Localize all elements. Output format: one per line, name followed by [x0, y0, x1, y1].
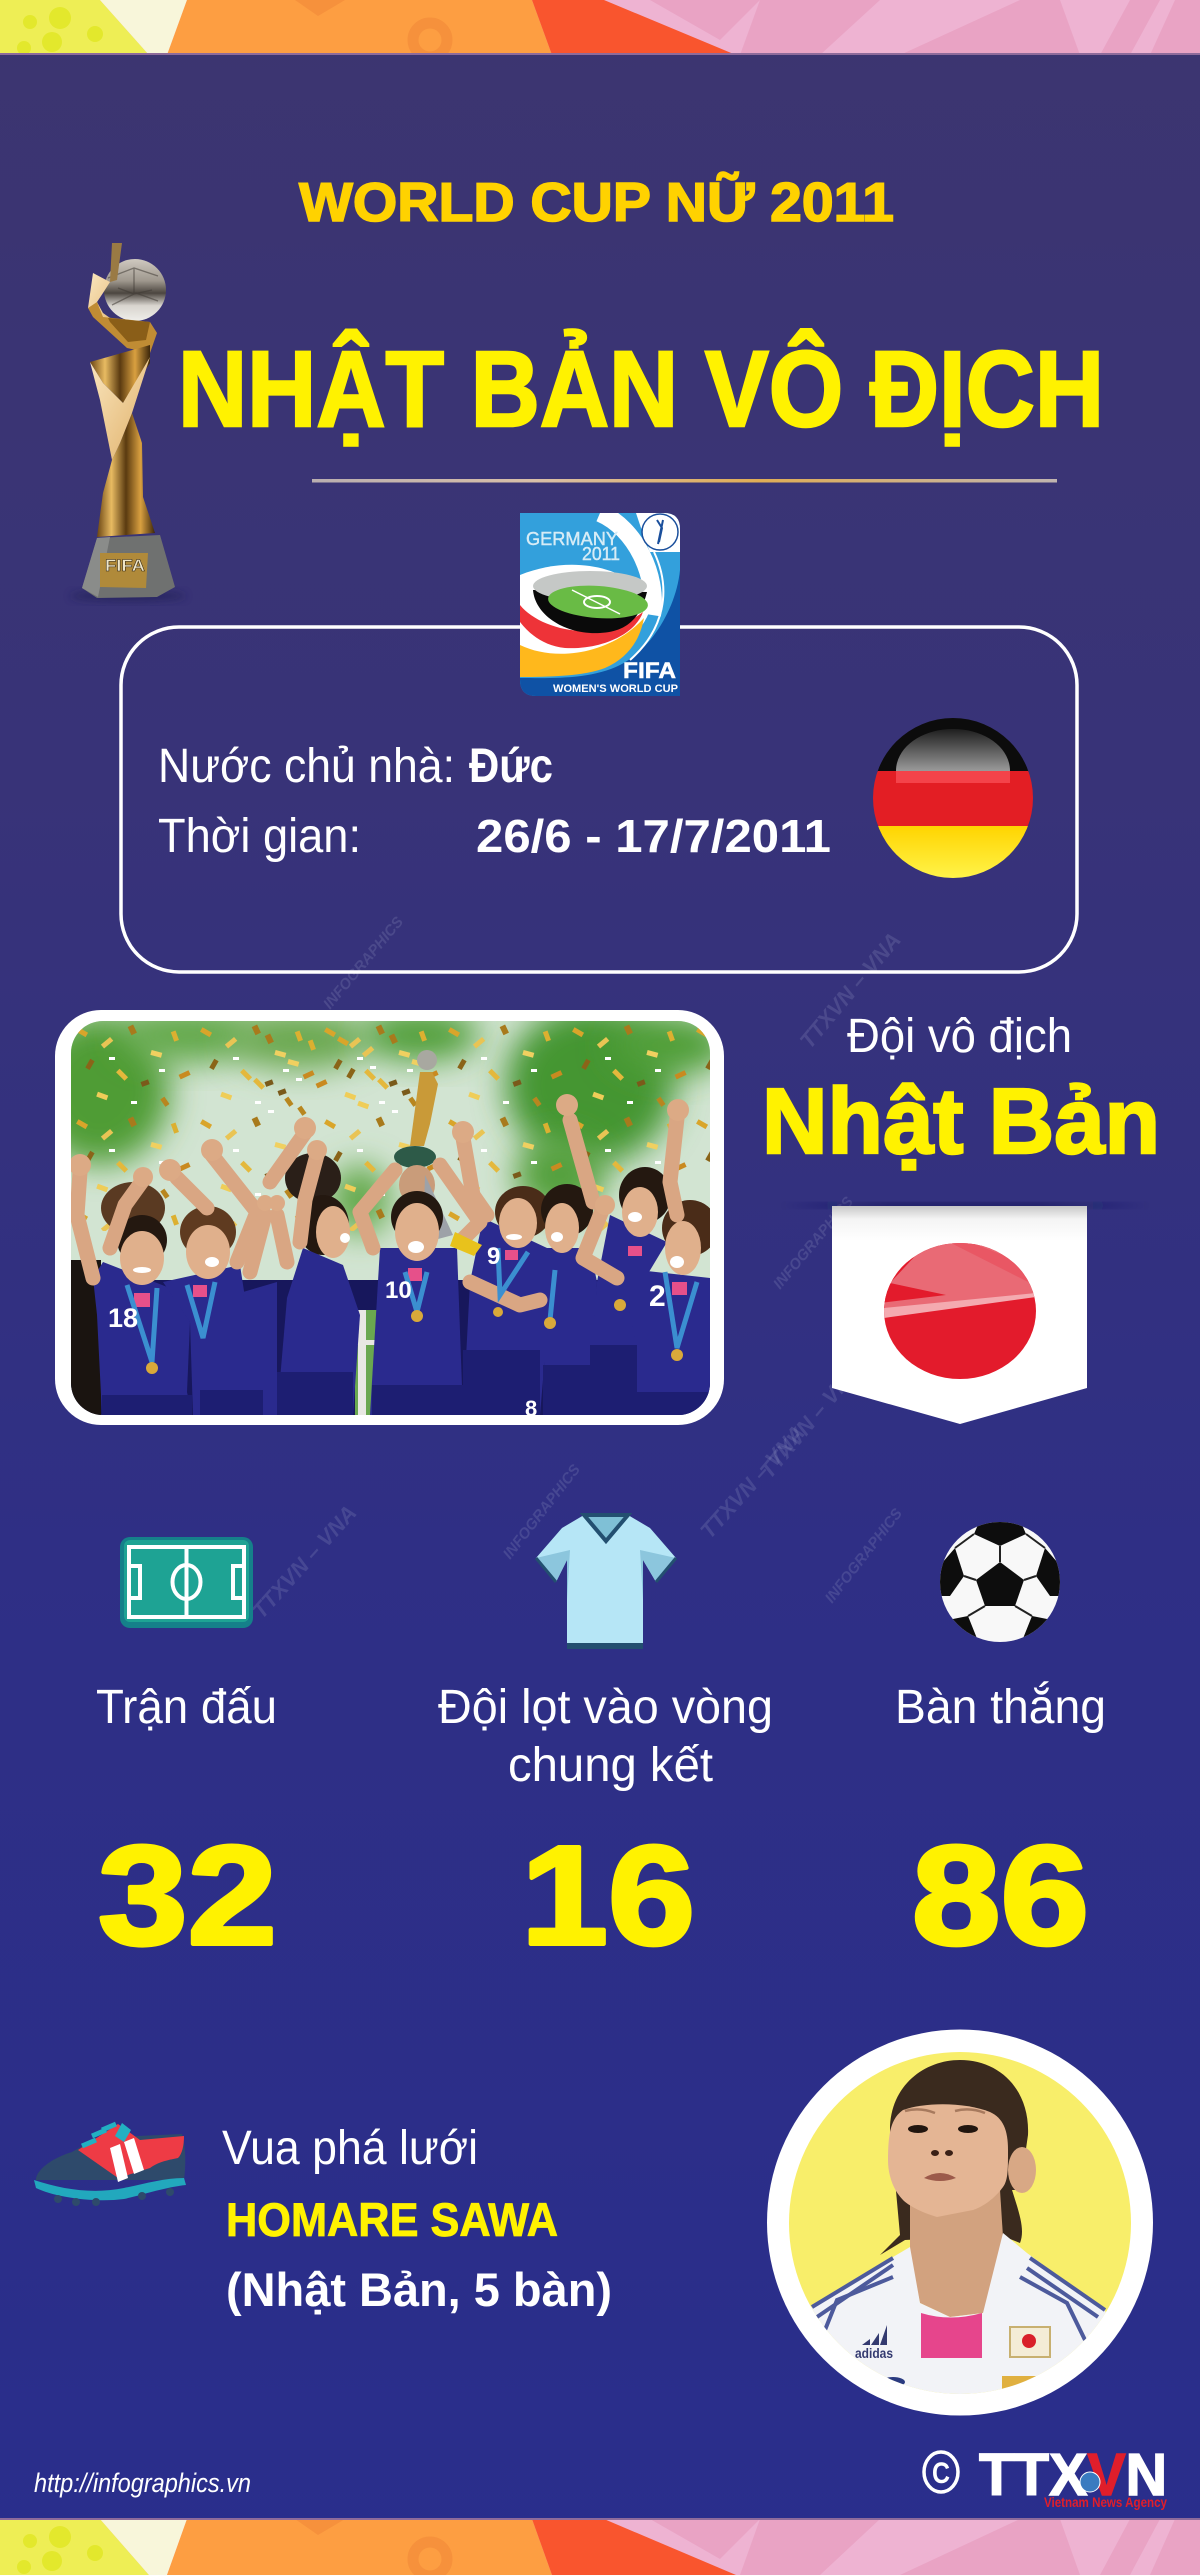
jerseys	[93, 1215, 710, 1415]
date line: 26/6 - 17/7/2011	[476, 810, 831, 862]
logo: FIFA Women's World Cup Germany 2011: 2011	[582, 544, 620, 564]
date line	[158, 810, 831, 863]
number: 32	[98, 1816, 277, 1974]
label: Bàn thắng	[895, 1680, 1106, 1734]
raised arms	[77, 1118, 677, 1305]
trophy held aloft	[394, 1050, 438, 1168]
label: Đội lọt vào vòng	[438, 1681, 773, 1734]
logo: FIFA Women's World Cup Germany 2011: GERMANY	[526, 529, 618, 549]
label	[438, 1681, 773, 1792]
label: Vua phá lưới: Vua phá lưới	[222, 2122, 478, 2175]
stat column: matches	[96, 1537, 277, 1974]
label: chung kết	[508, 1739, 713, 1792]
bottom decorative band	[0, 2518, 1200, 2575]
team name: Nhật Bản: Nhật Bản	[762, 1069, 1160, 1173]
icon: German flag	[870, 715, 1040, 882]
panel: host info box	[121, 627, 1077, 972]
watermarks: TTXVN – VNA	[795, 928, 906, 1053]
number: 86	[912, 1816, 1089, 1974]
kit details	[108, 1232, 697, 1421]
icon: Japan flag pennant	[819, 1202, 1111, 1424]
watermarks: INFOGRAPHICS	[320, 914, 407, 1013]
host country line: Đức	[469, 740, 553, 793]
heading: World Cup nữ 2011: WORLD CUP NỮ 2011	[299, 171, 894, 233]
label: Trận đấu	[96, 1681, 277, 1734]
stat column: goals	[895, 1520, 1106, 1974]
back hair of players	[118, 1167, 710, 1255]
watermarks: INFOGRAPHICS	[770, 1194, 857, 1293]
kit details: 9	[487, 1243, 500, 1270]
logo: FIFA Women's World Cup Germany 2011: FIFA	[623, 658, 676, 683]
supporting figures behind	[71, 1153, 710, 1415]
heading: Đội vô địch: Đội vô địch	[847, 1010, 1072, 1063]
stat column: finalist teams	[438, 1515, 773, 1974]
shorts	[102, 1345, 710, 1415]
source url: http://infographics.vn	[34, 2468, 251, 2498]
watermarks: INFOGRAPHICS	[822, 1505, 906, 1606]
logo: FIFA Women's World Cup Germany 2011: WOMEN'S WORLD CUP	[553, 683, 678, 695]
photo: Japan team celebrating	[30, 1005, 730, 1425]
date line: Thời gian:	[158, 810, 361, 863]
watermarks: TTXVN – VNA	[247, 1500, 361, 1623]
divider rule	[312, 479, 1057, 482]
title: Nhật Bản vô địch: NHẬT BẢN VÔ ĐỊCH	[178, 328, 1104, 449]
faces	[120, 1187, 701, 1285]
portrait: Homare Sawa	[767, 2030, 1153, 2420]
icon: football pitch	[120, 1537, 253, 1628]
number: 16	[521, 1816, 695, 1974]
icon: football boot	[34, 2123, 186, 2206]
kit details: 18	[108, 1303, 138, 1333]
top scorer text	[222, 2122, 612, 2316]
watermarks: TTXVN – VNA	[695, 1420, 809, 1543]
kit details: 10	[385, 1277, 412, 1304]
kit details: 8	[525, 1396, 537, 1421]
watermarks: INFOGRAPHICS	[500, 1461, 584, 1562]
logo: FIFA Women's World Cup Germany 2011	[520, 513, 680, 696]
logo: TTXVN copyright: TTXVN	[979, 2442, 1167, 2508]
icon: FIFA trophy	[70, 243, 186, 602]
logo: TTXVN copyright: C	[932, 2457, 950, 2490]
kit details: 2	[649, 1280, 666, 1313]
portrait: Homare Sawa: adidas	[855, 2345, 893, 2361]
icon: soccer ball	[940, 1522, 1060, 1642]
host country line: Nước chủ nhà:	[158, 740, 455, 793]
mouths	[133, 1212, 684, 1273]
icon: FIFA trophy: FIFA	[105, 556, 145, 575]
icon: jersey	[536, 1515, 676, 1649]
detail: (Nhật Bản, 5 bàn)	[226, 2263, 612, 2316]
watermarks: TTXVN – VNA	[755, 1358, 866, 1483]
player name: HOMARE SAWA	[226, 2193, 558, 2246]
fists	[69, 1094, 689, 1215]
logo: TTXVN copyright: Vietnam News Agency	[1044, 2494, 1167, 2510]
watermarks	[247, 914, 906, 1623]
top decorative band	[0, 0, 1200, 57]
